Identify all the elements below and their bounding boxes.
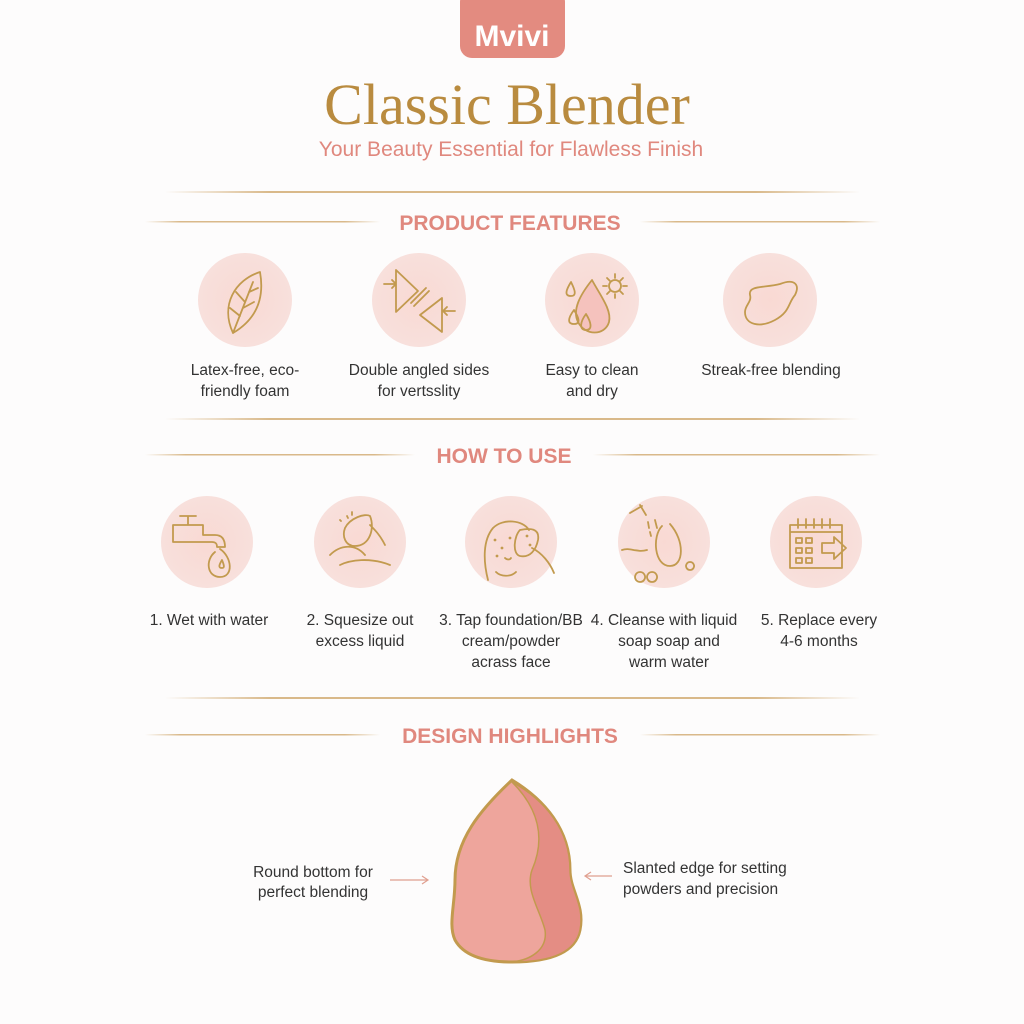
step labels: warm water	[628, 654, 709, 671]
icon: blending smear	[723, 253, 817, 347]
feature labels: Latex-free, eco-	[191, 362, 299, 379]
icon: face	[465, 496, 557, 588]
step labels: 4-6 months	[780, 633, 858, 650]
step labels: acrass face	[471, 654, 551, 671]
logo badge	[460, 0, 565, 58]
step labels: excess liquid	[316, 633, 404, 650]
panel: steps	[161, 496, 862, 588]
callout: slanted edge: powders and precision	[623, 881, 778, 898]
subtitle: Your Beauty Essential for Flawless Finish	[319, 138, 703, 161]
feature labels: for vertsslity	[378, 383, 461, 400]
feature labels	[191, 362, 841, 400]
icon: leaf	[198, 253, 292, 347]
sponge illustration	[452, 780, 581, 962]
icon: faucet	[161, 496, 253, 588]
callout: round bottom	[253, 864, 428, 901]
icon: cleanse	[618, 496, 710, 588]
step labels: 2. Squesize out	[307, 612, 414, 629]
heading: design highlights: DESIGN HIGHLIGHTS	[402, 725, 618, 748]
icon: angled sides	[372, 253, 466, 347]
feature labels: and dry	[566, 383, 618, 400]
title: Classic Blender	[324, 72, 690, 137]
heading: how to use: HOW TO USE	[437, 445, 571, 468]
step labels	[150, 612, 877, 671]
step labels: cream/powder	[462, 633, 560, 650]
logo badge: Mvivi	[474, 20, 550, 53]
step labels: 3. Tap foundation/BB	[439, 612, 583, 629]
feature labels: Double angled sides	[349, 362, 489, 379]
step labels: soap soap and	[618, 633, 720, 650]
step labels: 5. Replace every	[761, 612, 877, 629]
callout: slanted edge: Slanted edge for setting	[623, 860, 787, 877]
icon: calendar	[770, 496, 862, 588]
panel: features	[198, 253, 817, 347]
callout: round bottom: perfect blending	[258, 884, 368, 901]
step labels: 4. Cleanse with liquid	[591, 612, 737, 629]
icon: clean and dry	[545, 253, 639, 347]
icon: squeeze	[314, 496, 406, 588]
callout: slanted edge	[585, 860, 787, 898]
step labels: 1. Wet with water	[150, 612, 268, 629]
feature labels: Streak-free blending	[701, 362, 841, 379]
heading: product features: PRODUCT FEATURES	[399, 212, 621, 235]
callout: round bottom: Round bottom for	[253, 864, 373, 881]
feature labels: Easy to clean	[545, 362, 639, 379]
feature labels: friendly foam	[201, 383, 289, 400]
